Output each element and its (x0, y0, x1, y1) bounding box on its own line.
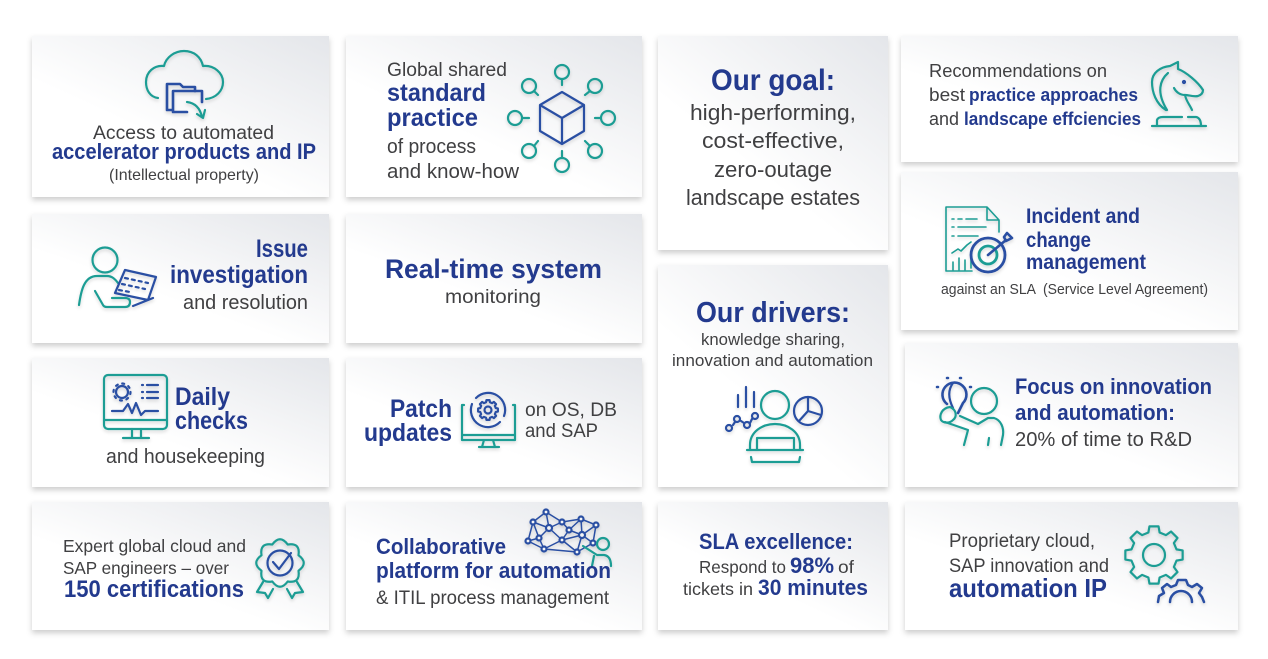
icon: cloud with folders (146, 51, 223, 118)
panel: focus on innovation (905, 343, 1238, 487)
icon: certificate badge (256, 539, 304, 598)
text: SLA excellence: SLA excellence: (699, 529, 853, 554)
text: patch updates scope: on OS, DB (525, 400, 617, 421)
text: issue investigation: investigation (170, 261, 308, 289)
text: accelerator products: Access to automated (93, 123, 274, 144)
panel: standard practice (346, 36, 642, 197)
text: our goal: cost-effective, (702, 128, 844, 153)
text: standard practice (387, 60, 520, 183)
text: focus on innovation: 20% of time to R&D (1015, 429, 1192, 451)
text: incident and change management: against an SLA (Service Level Agreement) (941, 281, 1208, 298)
text: SLA excellence: tickets in (683, 579, 753, 599)
text: our goal: Our goal: (711, 64, 835, 97)
panel: incident and change management (901, 172, 1238, 330)
panel: real-time monitoring (346, 214, 642, 343)
text: our goal: zero-outage (714, 157, 832, 182)
text: our drivers: knowledge sharing, (701, 330, 845, 349)
text: our goal: high-performing, (690, 100, 856, 125)
text: patch updates heading: updates (364, 419, 452, 447)
text: incident and change management (941, 205, 1208, 298)
text: certifications: SAP engineers – over (63, 558, 229, 578)
icon: network with person (526, 510, 611, 566)
text: issue investigation: and resolution (183, 292, 308, 314)
text: standard practice: of process (387, 136, 476, 158)
text: issue investigation: Issue (256, 235, 308, 263)
text: standard practice: and know-how (387, 161, 520, 183)
icon: monitor with gear and pulse (104, 375, 167, 438)
text: recommendations: best (929, 84, 965, 105)
icon: monitor with refresh gear (462, 393, 515, 447)
panel: issue investigation (32, 214, 329, 343)
text: SLA excellence: 98% (790, 553, 834, 578)
text: real-time monitoring: Real-time system (385, 254, 602, 284)
text: patch updates scope (525, 400, 617, 442)
text: collaborative platform: Collaborative (376, 534, 506, 559)
panel: our goal (658, 36, 888, 250)
panel: certifications (32, 502, 329, 630)
text: standard practice: Global shared (387, 60, 507, 81)
text: our drivers: Our drivers: (696, 297, 850, 329)
text: recommendations: and (929, 108, 959, 129)
text: automation IP (949, 531, 1109, 603)
text: SLA excellence: of (838, 557, 854, 577)
text: incident and change management: Incident and (1026, 205, 1140, 228)
text: our drivers (672, 297, 873, 370)
panel: SLA excellence (658, 502, 888, 630)
text: automation IP: Proprietary cloud, (949, 531, 1095, 552)
text: incident and change management: change (1026, 229, 1091, 252)
text: accelerator products (52, 123, 316, 184)
text: daily checks: and housekeeping (106, 446, 265, 468)
panel: automation IP (905, 502, 1238, 630)
text: recommendations: landscape effciencies (964, 108, 1141, 129)
panel: accelerator products (32, 36, 329, 197)
text: focus on innovation: Focus on innovation (1015, 374, 1212, 399)
panel: daily checks (32, 358, 329, 487)
text: daily checks (106, 383, 265, 468)
text: SLA excellence (683, 529, 868, 600)
text: SLA excellence: Respond to (699, 557, 786, 577)
text: our drivers: innovation and automation (672, 351, 873, 370)
text: focus on innovation: and automation: (1015, 400, 1175, 425)
text: patch updates heading (364, 395, 452, 447)
text: daily checks: checks (175, 407, 248, 435)
panel: patch updates (346, 358, 642, 487)
icon: cube with magnifiers (508, 65, 615, 172)
icon: person with laptop and charts (726, 387, 822, 462)
text: recommendations: practice approaches (969, 84, 1138, 105)
text: accelerator products: accelerator products and IP (52, 139, 316, 164)
text: certifications (63, 536, 246, 603)
text: standard practice: standard (387, 79, 486, 107)
text: accelerator products: (Intellectual property) (109, 167, 259, 184)
text: real-time monitoring (385, 254, 602, 308)
panel: collaborative platform (346, 502, 642, 630)
panel: recommendations (901, 36, 1238, 162)
text: certifications: 150 certifications (64, 576, 244, 603)
text: standard practice: practice (387, 104, 478, 132)
text: automation IP: automation IP (949, 573, 1107, 603)
text: real-time monitoring: monitoring (445, 287, 541, 308)
text: issue investigation (170, 235, 308, 314)
icon: document with target (946, 207, 1012, 272)
text: recommendations: Recommendations on (929, 60, 1107, 81)
icon: gears (1125, 526, 1204, 602)
text: daily checks: Daily (175, 383, 230, 411)
text: our goal (686, 64, 860, 210)
text: SLA excellence: 30 minutes (758, 575, 868, 600)
text: our goal: landscape estates (686, 185, 860, 210)
icon: chess knight (1152, 62, 1206, 126)
text: recommendations (929, 60, 1141, 129)
text: collaborative platform (376, 534, 611, 609)
panel: our drivers (658, 265, 888, 487)
text: automation IP: SAP innovation and (949, 556, 1109, 577)
text: patch updates scope: and SAP (525, 421, 598, 442)
text: collaborative platform: platform for automation (376, 558, 611, 583)
icon: person with light bulb (937, 378, 1003, 445)
text: incident and change management: management (1026, 251, 1146, 274)
text: focus on innovation (1015, 374, 1212, 451)
text: patch updates heading: Patch (390, 395, 452, 423)
icon: person with laptop (79, 248, 156, 307)
text: certifications: Expert global cloud and (63, 536, 246, 556)
text: collaborative platform: & ITIL process management (376, 588, 610, 609)
